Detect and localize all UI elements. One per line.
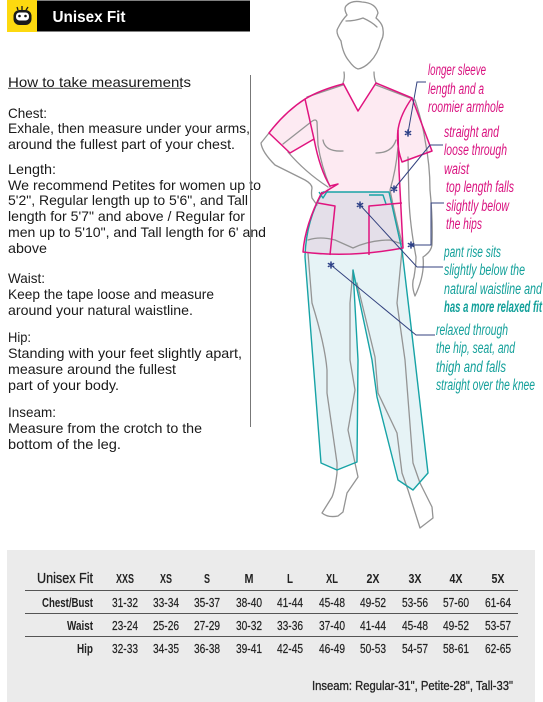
leader line: waist xyxy=(394,145,443,189)
table row: chest/bust: 45-48 xyxy=(319,595,345,610)
icon: asterisk sleeve xyxy=(405,130,411,136)
icon: logo face xyxy=(14,6,32,25)
icon: asterisk top length xyxy=(408,242,414,248)
text block: inseam xyxy=(8,404,202,452)
table row: hip: 46-49 xyxy=(319,641,345,656)
leader line: leg xyxy=(331,265,435,335)
text block: length xyxy=(8,161,266,256)
table row: hip: 34-35 xyxy=(153,641,179,656)
callout: top length xyxy=(408,179,514,248)
text block: hip: measure around the fullest xyxy=(8,361,176,377)
text block: chest xyxy=(8,105,250,152)
table row: hip: Hip xyxy=(77,641,93,656)
table row: chest/bust: 49-52 xyxy=(360,595,386,610)
leader line: sleeve xyxy=(408,82,426,133)
table row: hip: 32-33 xyxy=(112,641,138,656)
table row: hip: 42-45 xyxy=(277,641,303,656)
header bar xyxy=(7,0,250,32)
icon: asterisk leg xyxy=(328,262,334,268)
leader line: top length xyxy=(411,203,444,245)
table row: chest/bust: 33-34 xyxy=(153,595,179,610)
callout: waist xyxy=(391,124,507,192)
table row: waist: 53-57 xyxy=(485,618,511,633)
callout: waist: waist xyxy=(444,161,469,178)
callout: top length: slightly below xyxy=(446,198,510,215)
text block: chest: around the fullest part of your chest. xyxy=(8,136,235,152)
table row: chest/bust: 57-60 xyxy=(443,595,469,610)
text block: chest: Chest: xyxy=(8,105,47,121)
body outline xyxy=(261,1,433,528)
text block: hip xyxy=(8,329,242,393)
text block: waist: around your natural waistline. xyxy=(8,302,193,318)
table header row: S xyxy=(204,571,210,586)
table row: waist: 27-29 xyxy=(194,618,220,633)
table row: waist: 45-48 xyxy=(402,618,428,633)
table row: chest/bust xyxy=(42,595,511,610)
table row: waist: 23-24 xyxy=(112,618,138,633)
callout: sleeve: length and a xyxy=(428,81,484,98)
table row: chest/bust: 35-37 xyxy=(194,595,220,610)
callout: sleeve xyxy=(405,62,504,136)
callout: top length: top length falls xyxy=(446,179,514,196)
callout: pant rise xyxy=(357,202,543,316)
table row: waist: 33-36 xyxy=(277,618,303,633)
table row: chest/bust: 38-40 xyxy=(236,595,262,610)
table row: hip: 62-65 xyxy=(485,641,511,656)
text block: length: above xyxy=(8,240,47,256)
callout: waist: straight and xyxy=(444,124,500,141)
text block: length: 5'2", Regular length up to 5'6", and Tall xyxy=(8,192,248,208)
text block: length: We recommend Petites for women up to xyxy=(8,177,261,193)
table row: hip: 36-38 xyxy=(194,641,220,656)
table row: waist: Waist xyxy=(67,618,93,633)
table row: waist: 49-52 xyxy=(443,618,469,633)
table header row: XS xyxy=(160,571,172,586)
table header row: 2X xyxy=(366,571,380,586)
text block: hip: Standing with your feet slightly apart, xyxy=(8,345,242,361)
header title: Unisex Fit xyxy=(52,9,126,26)
callout: leg: relaxed through xyxy=(436,322,508,339)
table row: waist: 37-40 xyxy=(319,618,345,633)
text block: waist: Waist: xyxy=(8,270,45,286)
figure: model wearing scrubs xyxy=(261,1,433,528)
table header row: XXS xyxy=(116,571,134,586)
table row: waist: 41-44 xyxy=(360,618,386,633)
text block: length: Length: xyxy=(8,161,56,177)
callout: sleeve: roomier armhole xyxy=(428,99,504,116)
table header row: Unisex Fit xyxy=(37,570,94,587)
text block: inseam: Measure from the crotch to the xyxy=(8,420,202,436)
table row: hip: 54-57 xyxy=(402,641,428,656)
text block: length: length for 5'7" and above / Regular for xyxy=(8,208,245,224)
table row: chest/bust: 53-56 xyxy=(402,595,428,610)
callout: leg: thigh and falls xyxy=(436,359,506,376)
table row: hip: 39-41 xyxy=(236,641,262,656)
text block: inseam: Inseam: xyxy=(8,404,56,420)
icon: asterisk waist xyxy=(391,186,397,192)
pants fill xyxy=(305,192,428,490)
table header row xyxy=(37,570,505,587)
text block: waist: Keep the tape loose and measure xyxy=(8,286,214,302)
table header row: 5X xyxy=(492,571,505,586)
text block: chest: Exhale, then measure under your arms, xyxy=(8,120,250,136)
table row: chest/bust: 31-32 xyxy=(112,595,138,610)
inseam note: Inseam: Regular-31", Petite-28", Tall-33" xyxy=(312,678,513,693)
table header row: XL xyxy=(326,571,338,586)
leader line: pant rise xyxy=(360,205,443,267)
shirt outline xyxy=(343,83,432,162)
table row: chest/bust: Chest/Bust xyxy=(42,595,93,610)
table row: waist: 25-26 xyxy=(153,618,179,633)
table row: hip xyxy=(77,641,511,656)
instructions heading: How to take measurements xyxy=(8,74,191,90)
icon: asterisk pant rise xyxy=(357,202,363,208)
text block: length: men up to 5'10", and Tall length for 6' and xyxy=(8,224,266,240)
text block: inseam: bottom of the leg. xyxy=(8,436,121,452)
shirt fill xyxy=(269,83,432,254)
callout: waist: loose through xyxy=(444,142,507,159)
text block: hip: part of your body. xyxy=(8,377,119,393)
callout: pant rise: pant rise sits xyxy=(443,244,501,261)
text block: hip: Hip: xyxy=(8,329,31,345)
table row: waist: 30-32 xyxy=(236,618,262,633)
table header row: L xyxy=(287,571,293,586)
table header row: 3X xyxy=(408,571,422,586)
callout: top length: the hips xyxy=(446,216,482,233)
table header row: 4X xyxy=(450,571,463,586)
table header row: M xyxy=(244,571,254,586)
pants outline xyxy=(305,192,428,490)
text block: waist xyxy=(8,270,214,318)
table row: chest/bust: 61-64 xyxy=(485,595,511,610)
panel: size chart xyxy=(7,550,535,702)
callout: sleeve: longer sleeve xyxy=(428,62,486,79)
table row: waist xyxy=(67,618,511,633)
table row: hip: 50-53 xyxy=(360,641,386,656)
table row: chest/bust: 41-44 xyxy=(277,595,303,610)
callout: leg xyxy=(328,262,535,394)
table row: hip: 58-61 xyxy=(443,641,469,656)
